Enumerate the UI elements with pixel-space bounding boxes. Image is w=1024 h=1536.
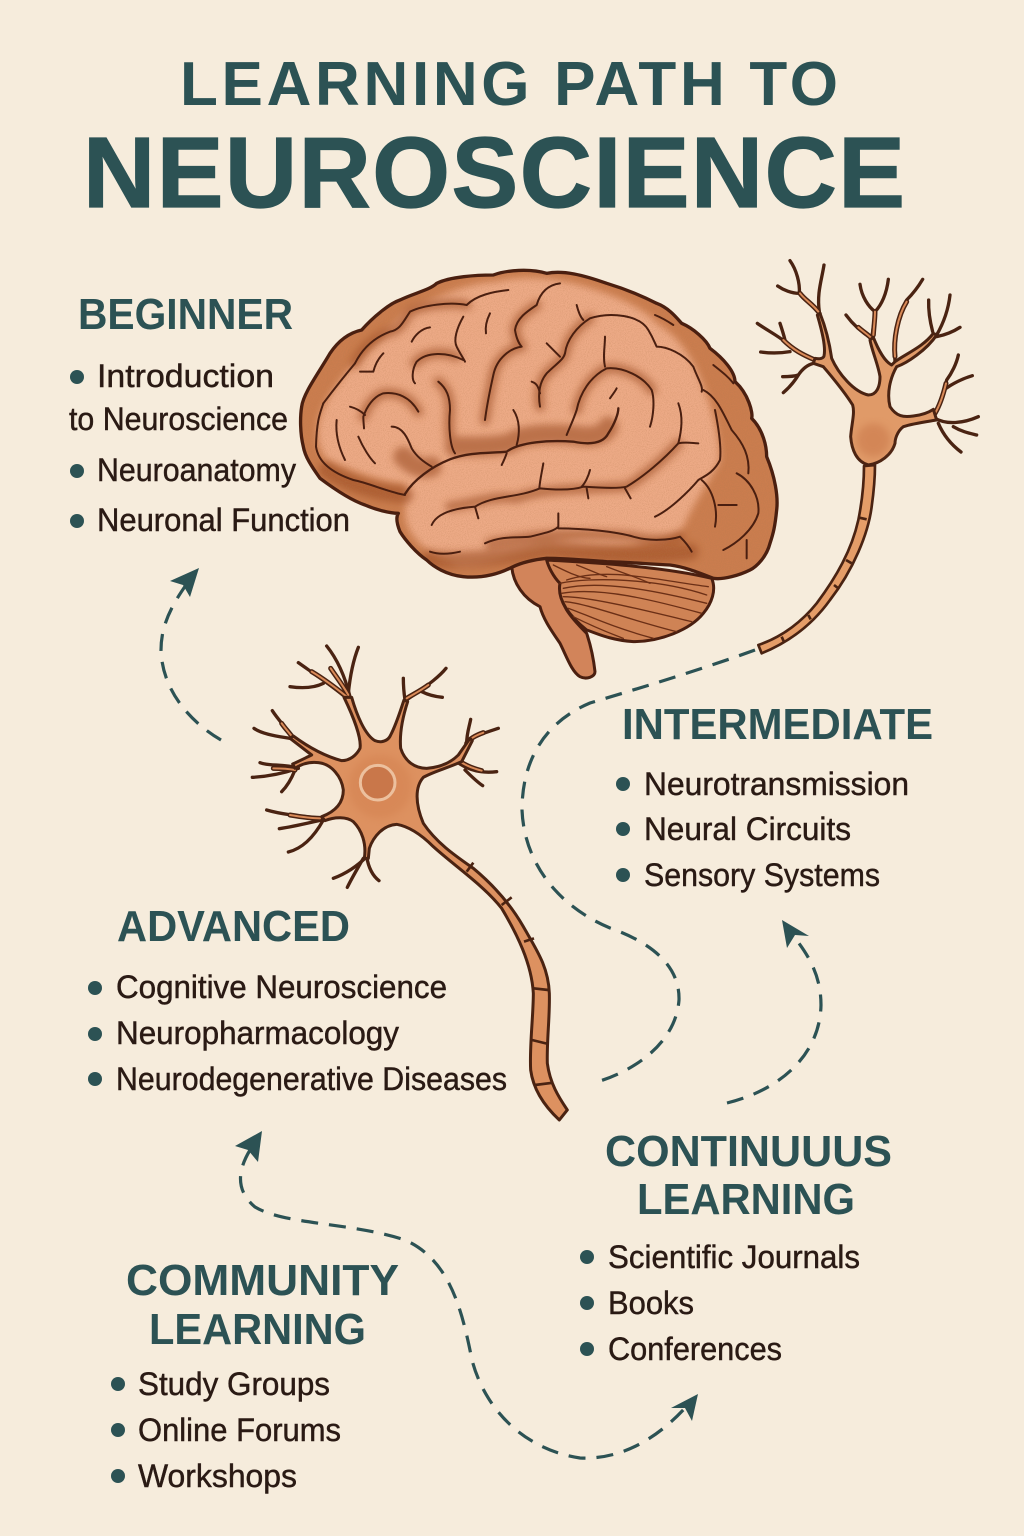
panel: beginner [69, 290, 350, 538]
bullet list: advanced [88, 969, 507, 1097]
bullet list: advanced: Neuropharmacology [116, 1015, 399, 1051]
cerebellum [547, 560, 714, 642]
dendrite branches [757, 261, 978, 452]
bullet list: beginner: Neuroanatomy [97, 452, 296, 488]
axon [758, 465, 875, 653]
bullet list: intermediate: Sensory Systems [644, 857, 880, 893]
panel: community learning [111, 1256, 399, 1494]
brain illustration [290, 250, 790, 683]
bullet list: beginner [69, 358, 350, 538]
title [83, 50, 905, 229]
bullet list: intermediate [616, 766, 909, 893]
bullet list: beginner: Introduction [97, 358, 274, 394]
cerebrum [298, 268, 779, 580]
gyrus shading [327, 304, 690, 560]
bullet list: continuous learning [580, 1239, 860, 1367]
bullet list: community learning: Workshops [138, 1458, 297, 1494]
neuron: upper right with curved axon [757, 261, 978, 653]
bullet list: beginner: Neuronal Function [97, 502, 350, 538]
bullet list: beginner: to Neuroscience [69, 401, 288, 437]
heading: community learning [126, 1256, 399, 1354]
bullet list: community learning: Online Forums [138, 1412, 341, 1448]
cell body and axon [290, 697, 567, 1120]
heading: continuous learning: CONTINUUUS [605, 1127, 892, 1176]
bullet list: intermediate: Neurotransmission [644, 766, 909, 802]
bullet list: advanced: Cognitive Neuroscience [116, 969, 447, 1005]
dashed arrow: continuous learning to intermediate [727, 920, 821, 1103]
title line 1: LEARNING PATH TO [180, 50, 838, 119]
sulci lines [316, 283, 759, 558]
bullet list: community learning: Study Groups [138, 1366, 330, 1402]
bullet list: intermediate: Neural Circuits [644, 811, 851, 847]
cell body [813, 313, 937, 465]
heading: intermediate: INTERMEDIATE [622, 700, 933, 749]
dashed arrow: intermediate to advanced [522, 650, 755, 1081]
heading: community learning: COMMUNITY [126, 1256, 399, 1305]
bullet list: continuous learning: Scientific Journals [608, 1239, 860, 1275]
myelin segments [467, 863, 553, 1085]
bullet list: continuous learning: Books [608, 1285, 694, 1321]
heading: continuous learning [605, 1127, 892, 1224]
heading: advanced: ADVANCED [117, 902, 350, 951]
dashed arrow: community learning to continuous learning [235, 1131, 698, 1458]
dashed arrow: advanced to beginner [161, 568, 221, 740]
panel: advanced [88, 902, 507, 1097]
heading: community learning: LEARNING [149, 1305, 366, 1354]
heading: continuous learning: LEARNING [637, 1175, 855, 1224]
bullet list: advanced: Neurodegenerative Diseases [116, 1061, 507, 1097]
brainstem [512, 558, 595, 678]
title line 2: NEUROSCIENCE [83, 117, 905, 229]
soma shading [857, 423, 890, 457]
dendrite tips [252, 646, 498, 887]
neuron: lower left with long axon [252, 646, 567, 1120]
soma shading and nucleus [348, 755, 412, 818]
panel: intermediate [616, 700, 933, 893]
bullet list: continuous learning: Conferences [608, 1331, 782, 1367]
bullet list: community learning [111, 1366, 341, 1494]
panel: continuous learning [580, 1127, 892, 1367]
heading: beginner: BEGINNER [78, 290, 293, 339]
